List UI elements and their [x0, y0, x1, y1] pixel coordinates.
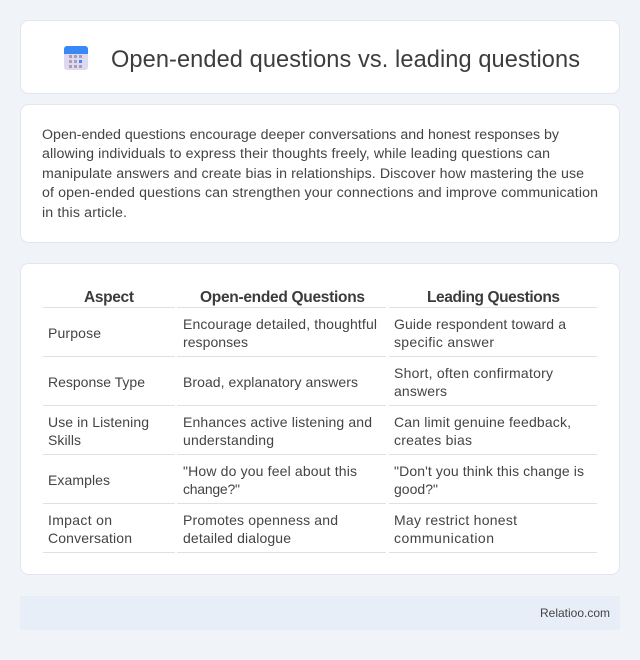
footer [20, 596, 620, 630]
text block: introduction: in this article. [42, 205, 127, 221]
panel: comparison table [20, 264, 620, 574]
row: response type: Response Type [48, 374, 145, 390]
text block: introduction [42, 127, 598, 221]
row: impact on conversation: Conversation [48, 530, 132, 546]
row: response type: Broad, explanatory answers [183, 374, 358, 390]
row: impact on conversation [48, 512, 517, 546]
row: purpose: Purpose [48, 325, 101, 341]
row: examples: good?" [394, 481, 438, 497]
row: examples: Examples [48, 472, 110, 488]
row: use in listening skills: Enhances active listening and [183, 414, 372, 430]
row: use in listening skills: creates bias [394, 432, 472, 448]
row: examples: "Don't you think this change is [394, 463, 584, 479]
row: impact on conversation: Promotes openness and [183, 512, 338, 528]
row: purpose: responses [183, 334, 248, 350]
row: use in listening skills: Skills [48, 432, 81, 448]
row: purpose: Encourage detailed, thoughtful [183, 316, 377, 332]
row: response type [48, 365, 553, 399]
table header [84, 289, 560, 306]
footer: Relatioo.com [540, 606, 610, 620]
row: impact on conversation: May restrict honest [394, 512, 517, 528]
panel: header [20, 20, 620, 94]
table header: Aspect [84, 289, 134, 306]
title: Open-ended questions vs. leading questions [111, 47, 580, 73]
row: response type: answers [394, 383, 447, 399]
row: purpose [48, 316, 566, 350]
row: response type: Short, often confirmatory [394, 365, 553, 381]
panel: introduction [20, 104, 620, 242]
icon: calendar [64, 46, 88, 70]
row: purpose: specific answer [394, 334, 494, 350]
row: impact on conversation: Impact on [48, 512, 112, 528]
row: use in listening skills: Can limit genuine feedback, [394, 414, 571, 430]
row: examples [48, 463, 584, 497]
row: examples: "How do you feel about this [183, 463, 357, 479]
row: impact on conversation: detailed dialogue [183, 530, 291, 546]
row: use in listening skills: Use in Listening [48, 414, 149, 430]
row: use in listening skills [48, 414, 571, 448]
table header: Open-ended Questions [200, 289, 365, 306]
row: examples: change?" [183, 481, 240, 497]
text block: introduction: Open-ended questions encourage deeper conversations and honest responses by [42, 127, 560, 143]
table header: Leading Questions [427, 289, 560, 306]
row: purpose: Guide respondent toward a [394, 316, 566, 332]
text block: introduction: manipulate answers and create bias in relationships. Discover how mastering the use [42, 166, 584, 182]
row: use in listening skills: understanding [183, 432, 274, 448]
row: impact on conversation: communication [394, 530, 494, 546]
text block: introduction: of open-ended questions can strengthen your connections and improve communication [42, 185, 598, 201]
text block: introduction: allowing individuals to express their thoughts freely, while leading questions can [42, 146, 550, 162]
